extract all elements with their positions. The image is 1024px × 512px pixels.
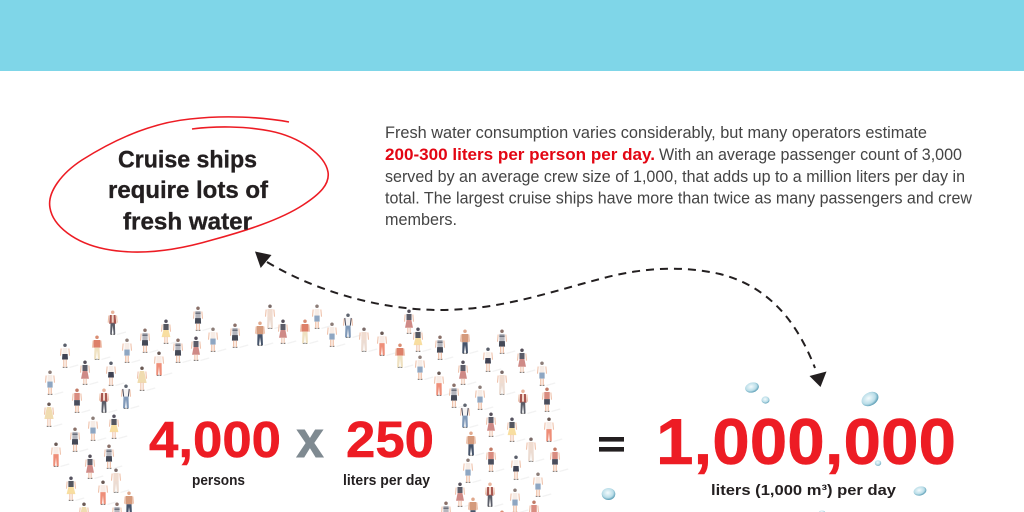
heading: cruise ships require lots of fresh water: require lots of <box>108 177 269 204</box>
top banner <box>0 0 1024 71</box>
dashed double-headed arrow <box>255 252 826 387</box>
equals sign <box>599 437 624 452</box>
body paragraph: members. <box>385 210 457 229</box>
right crowd of people <box>327 309 568 512</box>
multiply sign: x <box>296 411 324 468</box>
heading: cruise ships require lots of fresh water <box>108 146 269 236</box>
left crowd of people <box>44 304 330 512</box>
body paragraph: total. The largest cruise ships have more than twice as many passengers and crew <box>385 188 973 208</box>
body paragraph <box>385 123 973 229</box>
body paragraph: With an average passenger count of 3,000 <box>659 145 962 164</box>
heading: cruise ships require lots of fresh water: fresh water <box>123 208 252 236</box>
body paragraph: Fresh water consumption varies considerably, but many operators estimate <box>385 123 927 142</box>
body paragraph: served by an average crew size of 1,000, that adds up to a million liters per day in <box>385 167 965 186</box>
heading: cruise ships require lots of fresh water: Cruise ships <box>118 146 257 174</box>
number: 4,000 persons: persons <box>192 473 245 489</box>
number: 1,000,000 liters per day: liters (1,000 m³) per day <box>711 483 896 499</box>
number: 4,000 persons: 4,000 <box>149 411 281 468</box>
number: 250 liters per day: 250 <box>346 411 434 468</box>
body paragraph: 200-300 liters per person per day. <box>385 145 655 164</box>
number: 250 liters per day <box>343 411 434 489</box>
number: 1,000,000 liters per day: 1,000,000 <box>656 405 956 478</box>
water droplets <box>602 381 927 512</box>
red hand-drawn ellipse <box>50 117 328 252</box>
number: 250 liters per day: liters per day <box>343 473 430 489</box>
